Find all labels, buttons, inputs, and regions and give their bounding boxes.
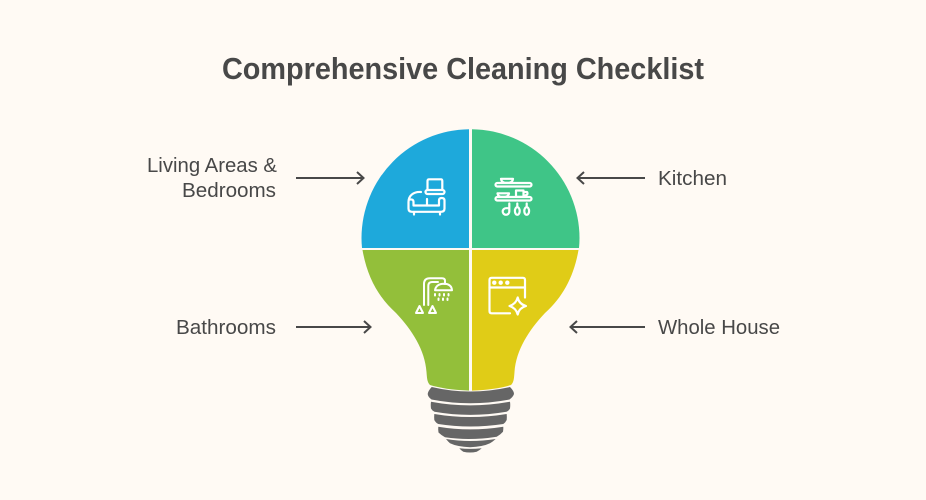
panel: bathrooms segment [362, 250, 469, 391]
arrow: kitchen [578, 172, 645, 184]
panel: living areas segment [362, 129, 469, 248]
bulb screw base [428, 387, 514, 452]
arrow: bathrooms [296, 321, 370, 333]
icon: kitchen shelves [496, 179, 532, 215]
light bulb diagram [362, 129, 580, 452]
label: living areas and bedrooms: Bedrooms [182, 180, 276, 202]
icon: sofa and laptop [408, 179, 444, 214]
label: living areas and bedrooms: Living Areas & [147, 155, 278, 177]
title: Comprehensive Cleaning Checklist [222, 51, 704, 86]
label: bathrooms: Bathrooms [176, 317, 276, 339]
label: living areas and bedrooms [147, 155, 278, 202]
icon: window with sparkle [490, 278, 526, 314]
panel: whole house segment [472, 250, 578, 391]
panel: kitchen segment [472, 129, 580, 248]
arrow: whole house [570, 321, 645, 333]
label: kitchen: Kitchen [658, 168, 727, 190]
label: whole house: Whole House [658, 317, 780, 339]
arrow: living areas [296, 172, 364, 184]
icon: shower [416, 278, 452, 313]
